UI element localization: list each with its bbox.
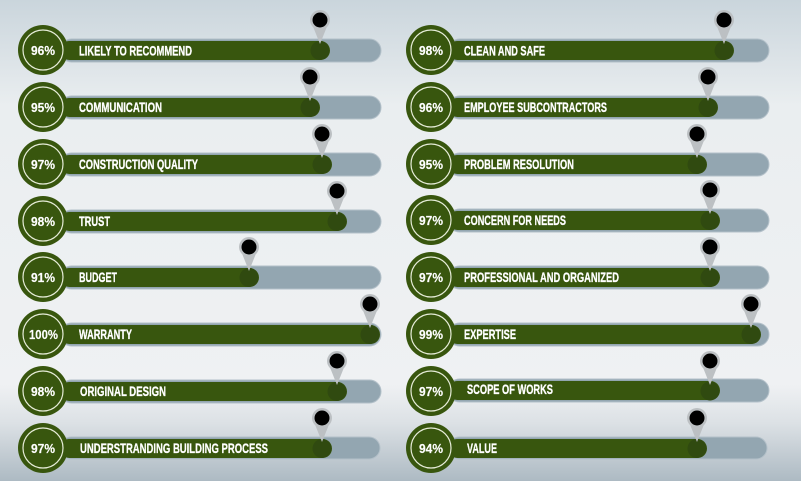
row: likely to recommend 96% — [18, 10, 381, 75]
row: budget 91% — [18, 237, 381, 302]
panel: left column — [18, 10, 381, 473]
row: warranty 100%: WARRANTY — [79, 327, 132, 342]
row: likely to recommend 96%: LIKELY TO RECOMMEND — [79, 44, 192, 58]
row: warranty 100%: 100% — [29, 327, 58, 342]
row: budget 91%: 91% — [31, 270, 55, 285]
row: expertise 99%: 99% — [419, 327, 443, 342]
row: concern for needs 97% — [406, 180, 769, 245]
row: employee subcontractors 96%: EMPLOYEE SUBCONTRACTORS — [464, 100, 607, 115]
row: original design 98%: ORIGINAL DESIGN — [80, 384, 166, 399]
row: communication 95%: COMMUNICATION — [79, 100, 162, 115]
row: clean and safe 98%: CLEAN AND SAFE — [464, 44, 545, 58]
row: problem resolution 95%: PROBLEM RESOLUTION — [464, 157, 574, 172]
row: communication 95% — [18, 67, 381, 132]
row: expertise 99% — [406, 294, 769, 359]
row: concern for needs 97%: 97% — [419, 213, 443, 228]
row: employee subcontractors 96%: 96% — [419, 100, 443, 115]
row: scope of works 97% — [406, 351, 769, 416]
row: trust 98%: TRUST — [79, 214, 111, 229]
row: communication 95%: 95% — [31, 100, 55, 115]
row: understanding building process 97%: UNDERSTRANDING BUILDING PROCESS — [80, 441, 268, 456]
row: value 94%: 94% — [419, 441, 443, 456]
row: original design 98%: 98% — [31, 384, 55, 399]
row: value 94%: VALUE — [467, 441, 497, 456]
row: likely to recommend 96%: 96% — [31, 43, 55, 58]
panel: right column — [406, 10, 769, 473]
row: problem resolution 95%: 95% — [419, 157, 443, 172]
row: budget 91%: BUDGET — [79, 270, 118, 285]
row: clean and safe 98% — [406, 10, 769, 75]
row: clean and safe 98%: 98% — [419, 43, 443, 58]
row: trust 98% — [18, 181, 381, 246]
row: construction quality 97% — [18, 124, 381, 189]
row: professional and organized 97%: 97% — [419, 270, 443, 285]
row: problem resolution 95% — [406, 124, 769, 189]
row: warranty 100% — [18, 294, 381, 359]
row: trust 98%: 98% — [31, 214, 55, 229]
row: scope of works 97%: SCOPE OF WORKS — [467, 382, 553, 397]
row: construction quality 97%: CONSTRUCTION QUALITY — [79, 157, 198, 172]
row: understanding building process 97%: 97% — [31, 441, 55, 456]
row: concern for needs 97%: CONCERN FOR NEEDS — [464, 213, 566, 228]
row: employee subcontractors 96% — [406, 67, 769, 132]
row: construction quality 97%: 97% — [31, 157, 55, 172]
row: original design 98% — [18, 351, 381, 416]
row: professional and organized 97%: PROFESSIONAL AND ORGANIZED — [464, 270, 619, 285]
row: expertise 99%: EXPERTISE — [464, 327, 516, 342]
row: scope of works 97%: 97% — [419, 384, 443, 399]
row: understanding building process 97% — [18, 408, 380, 473]
row: value 94% — [406, 408, 767, 473]
row: professional and organized 97% — [406, 237, 769, 302]
